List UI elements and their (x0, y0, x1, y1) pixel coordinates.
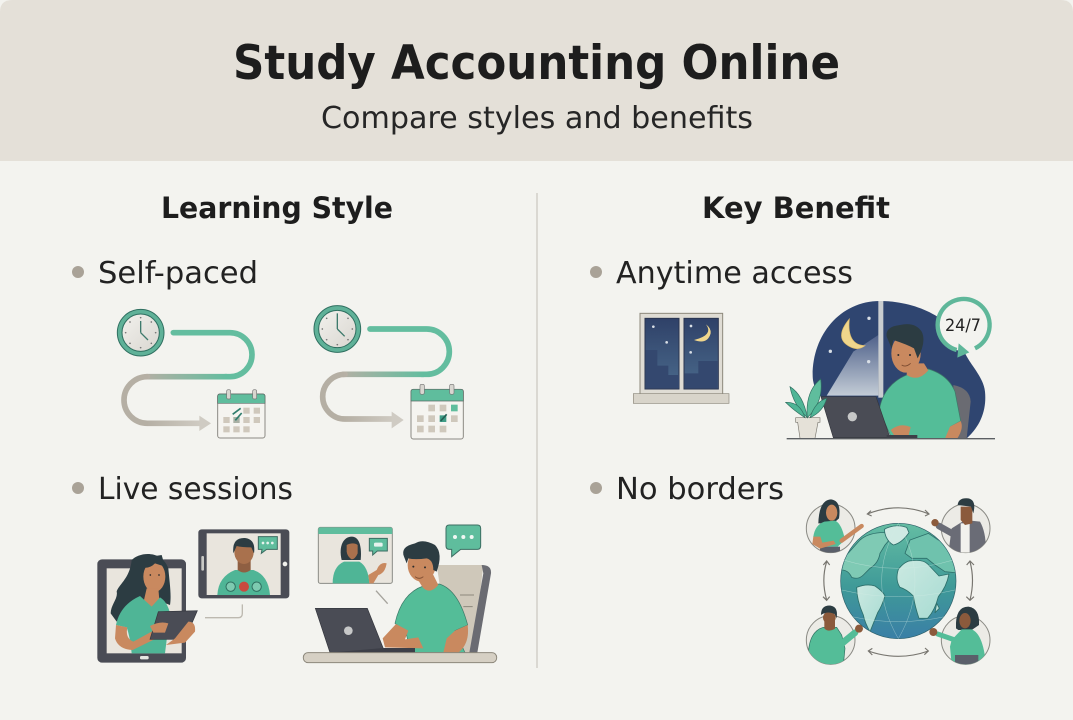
bullet: live sessions: Live sessions (98, 472, 293, 507)
chat bubble (446, 525, 481, 557)
path: clock to calendar 2 (323, 329, 449, 428)
person: top left (806, 499, 862, 555)
title: Study Accounting Online (233, 36, 840, 91)
illustration: no borders (806, 498, 990, 665)
chair (437, 565, 491, 653)
icon: clock 1 (117, 309, 164, 356)
bullet: anytime access: Anytime access (616, 256, 853, 291)
man at laptop (383, 541, 468, 653)
person: top right (931, 498, 990, 553)
bullet: self-paced: Self-paced (98, 256, 258, 291)
connector line (205, 604, 242, 618)
icon: clock 2 (314, 306, 361, 352)
bullet: no borders: No borders (616, 472, 784, 507)
globe (841, 523, 962, 639)
desk (303, 653, 497, 663)
illustration: anytime access (633, 299, 995, 439)
potted plant (786, 379, 827, 438)
man at laptop (879, 324, 962, 438)
subtitle: Compare styles and benefits (321, 101, 753, 136)
panel: key benefit (590, 191, 995, 665)
24/7 badge: 24/7 (945, 316, 981, 335)
heading: learning style: Learning Style (161, 191, 393, 225)
tablet with woman (97, 554, 197, 663)
person: bottom left (806, 606, 863, 665)
person: bottom right (929, 607, 990, 665)
circular exchange arrows (823, 508, 974, 656)
night window (633, 313, 729, 403)
ground line (787, 437, 995, 441)
path: clock to calendar 1 (124, 333, 252, 431)
panel: learning style (72, 191, 497, 663)
24/7 badge (937, 299, 990, 358)
header band (0, 0, 1073, 161)
illustration: self-paced paths (117, 306, 463, 439)
chair (953, 385, 971, 438)
video call window (318, 527, 392, 583)
icon: calendar 1 (218, 390, 265, 438)
laptop (821, 397, 917, 438)
night scene backdrop (813, 301, 985, 438)
laptop (315, 608, 415, 653)
connector line (376, 591, 388, 604)
tablet with man on video call (198, 529, 289, 598)
icon: calendar 2 (411, 384, 463, 439)
heading: key benefit: Key Benefit (702, 191, 890, 225)
column divider (536, 193, 538, 668)
illustration: live sessions (97, 525, 497, 663)
